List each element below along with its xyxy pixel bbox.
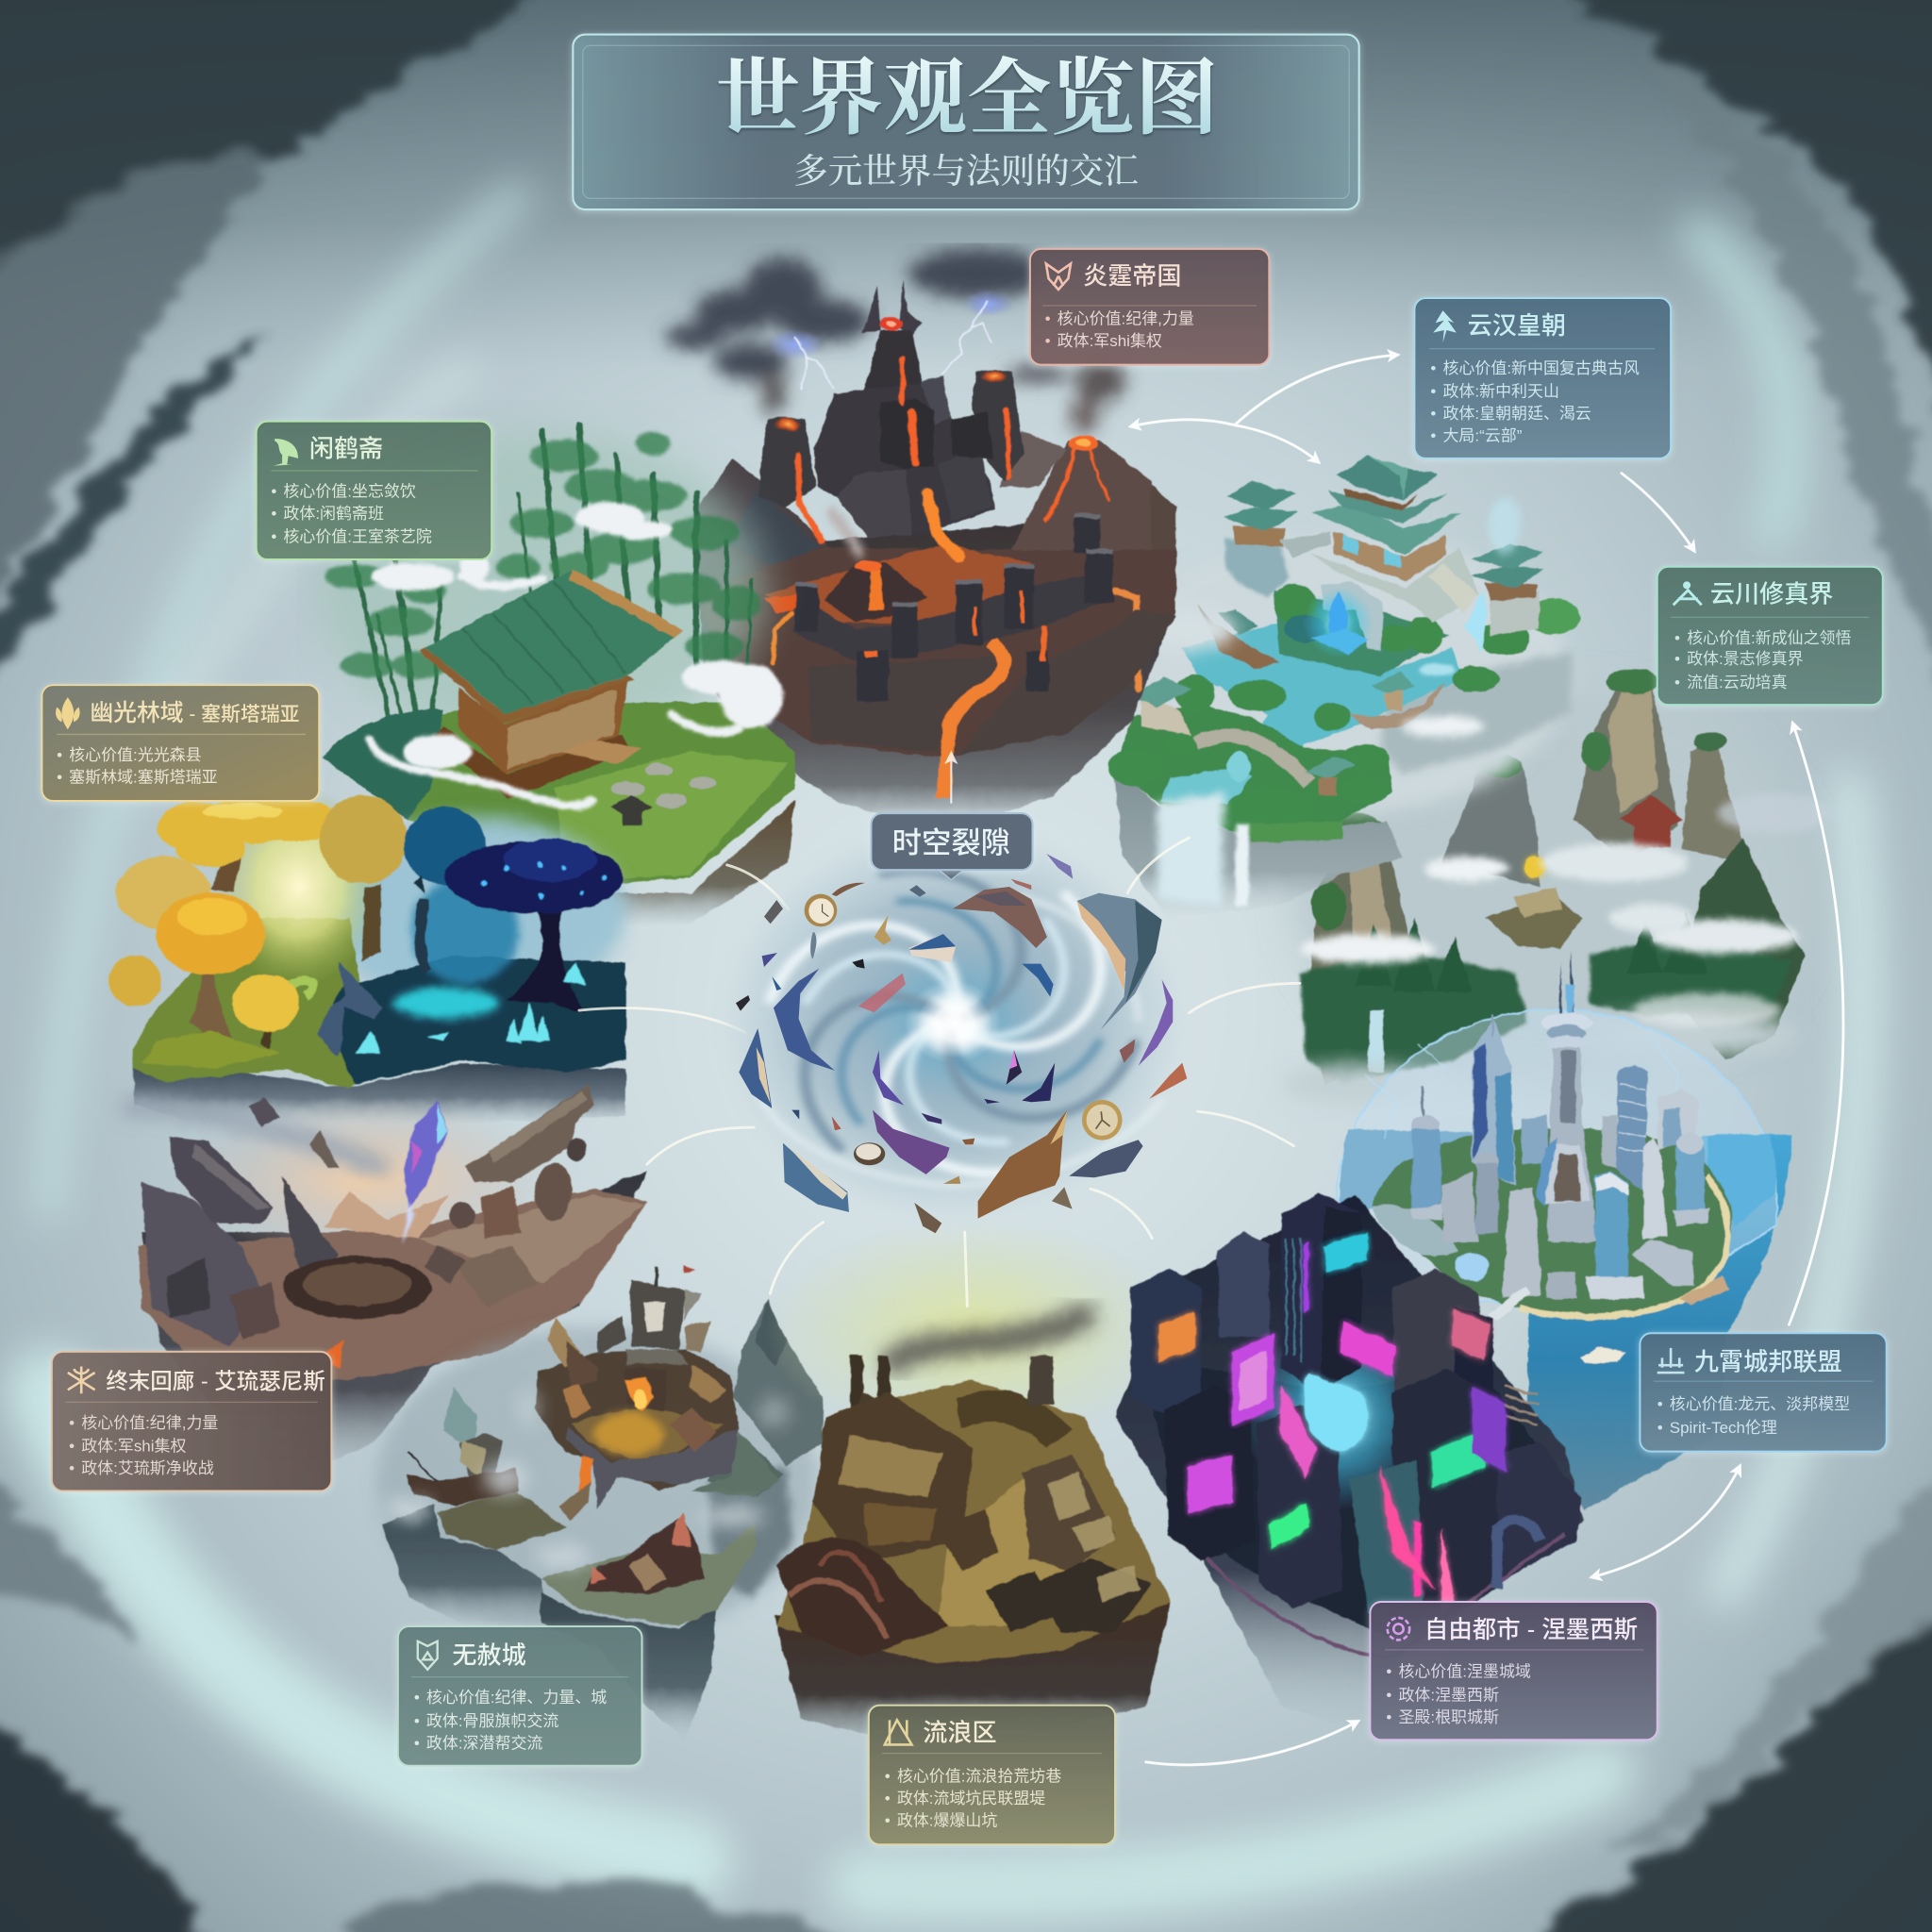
panel: 流浪区: • [885, 1812, 891, 1830]
subtitle: 多元世界与法则的交汇 [793, 151, 1139, 190]
island: cyber city [1115, 1192, 1583, 1731]
panel: 闲鹤斋: 核心价值:王室茶艺院 [283, 528, 432, 546]
panel: 云汉皇朝: • [1430, 427, 1436, 445]
panel: 幽光林域: • [57, 746, 62, 764]
arrow: to cloud palace [1235, 425, 1319, 462]
clock: upper left [805, 883, 865, 959]
palace [1333, 531, 1446, 582]
arrow: to volcano empire [1131, 420, 1235, 426]
side towers [759, 418, 816, 507]
panel: 炎霆帝国 [1030, 249, 1269, 365]
crater [283, 1257, 431, 1319]
panel: 云川修真界: 云川修真界 [1710, 580, 1833, 608]
central keep [861, 286, 880, 333]
panel: 云汉皇朝: • [1430, 405, 1436, 423]
glow rock [318, 962, 384, 1057]
panel: 九霄城邦联盟: 九霄城邦联盟 [1694, 1347, 1842, 1375]
debris shards [736, 854, 1187, 1233]
right pagoda [1491, 591, 1540, 635]
panel: 闲鹤斋 [257, 422, 491, 559]
crystal rift [404, 1101, 448, 1208]
left pagoda [1233, 525, 1286, 547]
island: glowlight forest [109, 786, 625, 1125]
panel: 无赦城: 政体:骨服旗帜交流 [426, 1712, 558, 1730]
wrecks [168, 1137, 274, 1224]
panel: 流浪区: • [885, 1768, 891, 1786]
spire [733, 1299, 824, 1465]
panel: 云川修真界: • [1674, 650, 1680, 668]
fort [535, 1349, 739, 1491]
panel: 云汉皇朝: 核心价值:新中国复古典古风 [1442, 359, 1640, 377]
panel: 九霄城邦联盟 [1640, 1333, 1887, 1452]
panel: 幽光林域: • [57, 768, 62, 786]
island: shattered wasteland [123, 1085, 648, 1485]
panel: 云汉皇朝: • [1430, 359, 1436, 377]
island: karst mountains [1281, 669, 1831, 1104]
panel: 云汉皇朝: 云汉皇朝 [1468, 311, 1566, 340]
rift label [871, 813, 1033, 880]
panel: 终末回廊: 政体:军shi集权 [81, 1438, 186, 1456]
title: 世界观全览图 [716, 54, 1219, 146]
clock: lower right [1082, 1100, 1123, 1141]
rift upward arrow [950, 754, 952, 804]
left isle [443, 1387, 476, 1453]
lower cliff [696, 512, 1176, 833]
panel: 闲鹤斋: 政体:闲鹤斋班 [283, 505, 384, 523]
lower wall [792, 575, 1107, 660]
panel: 云汉皇朝: • [1430, 383, 1436, 401]
ground [139, 1189, 648, 1390]
panel: 无赦城: • [414, 1734, 420, 1752]
icon: shield crest [418, 1641, 438, 1670]
panel: 自由都市 [1370, 1602, 1657, 1740]
panel: 云汉皇朝: 大局:“云部” [1442, 427, 1523, 445]
panel: 自由都市: • [1386, 1708, 1391, 1726]
panel: 闲鹤斋: 闲鹤斋 [309, 435, 383, 463]
palace platform [1311, 547, 1478, 623]
panel: 自由都市: • [1386, 1663, 1391, 1681]
lightning [795, 300, 992, 390]
arrow: alliance to cultivation realm [1789, 724, 1843, 1324]
arrow: wasteland to free city [1146, 1722, 1357, 1765]
island: pirate stronghold [377, 1266, 824, 1739]
icon: flame crest [1046, 264, 1071, 290]
panel: 闲鹤斋: • [271, 505, 276, 523]
boats [1198, 604, 1280, 668]
panel: 终末回廊: • [69, 1459, 75, 1477]
panel: 流浪区: 核心价值:流浪拾荒坊巷 [897, 1768, 1061, 1786]
arrow: free city to alliance [1592, 1466, 1740, 1577]
panel: 炎霆帝国: • [1045, 332, 1051, 350]
panel: 闲鹤斋: • [271, 482, 276, 500]
panel: 流浪区: • [885, 1790, 891, 1807]
panel: 流浪区: 政体:爆爆山坑 [897, 1812, 997, 1830]
icon: crane [274, 439, 298, 466]
panel: 无赦城 [398, 1626, 641, 1766]
island: scrap wasteland [764, 1220, 1183, 1756]
panel: 闲鹤斋: 核心价值:坐忘敛饮 [283, 482, 416, 500]
lava streams [773, 358, 1139, 689]
panel: 云川修真界: • [1674, 674, 1680, 691]
time-space vortex [710, 814, 1195, 1233]
central spire [1569, 951, 1574, 1012]
icon: cyber flower [1388, 1618, 1409, 1640]
fog [387, 1390, 790, 1568]
clouds [371, 503, 784, 769]
sea [1528, 1135, 1792, 1509]
storm clouds [665, 248, 1125, 434]
rock mountains and ground [696, 459, 827, 607]
connector lines to the rift [579, 838, 1300, 1306]
panel: 幽光林域 [42, 685, 319, 801]
left inner volcano [824, 563, 927, 623]
panel: 九霄城邦联盟: 核心价值:龙元、淡邦模型 [1670, 1395, 1850, 1413]
left tower base [1224, 538, 1290, 597]
panel: 炎霆帝国: • [1045, 310, 1051, 328]
arrows between worlds [1131, 355, 1843, 1765]
icon: cloud pine [1433, 310, 1457, 342]
icon: withered lotus [68, 1366, 95, 1393]
panel: 云汉皇朝 [1414, 298, 1671, 458]
panel: 云汉皇朝: 政体:皇朝朝廷、渴云 [1442, 405, 1591, 423]
island: cloud palace [1108, 456, 1580, 918]
land [1371, 1128, 1732, 1317]
panel: 云川修真界 [1657, 567, 1883, 705]
panel: 无赦城: 无赦城 [452, 1641, 526, 1669]
panel: 终末回廊 [52, 1352, 331, 1491]
arrow: court to cultivation realm [1622, 474, 1694, 551]
panel: 自由都市: 圣殿:根职城斯 [1398, 1708, 1499, 1726]
panel: 自由都市: 自由都市 - 涅墨西斯 [1424, 1617, 1638, 1643]
panel: 终末回廊: 政体:艾琉斯净收战 [81, 1459, 214, 1477]
panel: 幽光林域: 核心价值:光光森县 [69, 746, 202, 764]
panel: 终末回廊: • [69, 1414, 75, 1432]
cliffs [382, 1503, 547, 1629]
spiral arms [755, 836, 1163, 1208]
panel: 幽光林域: 幽光林域 - 塞斯塔瑞亚 [90, 700, 300, 726]
panel: 终末回廊: 核心价值:纪律,力量 [81, 1414, 218, 1432]
panel: 无赦城: 核心价值:纪律、力量、城 [426, 1689, 607, 1707]
icon: cultivator [1674, 583, 1702, 605]
panel: 流浪区: 政体:流域坑民联盟堤 [897, 1790, 1045, 1807]
blue trees [404, 807, 486, 885]
panel: 云川修真界: 核心价值:新成仙之领悟 [1687, 629, 1852, 647]
panel: 炎霆帝国: 政体:军shi集权 [1058, 332, 1162, 350]
panel: 自由都市: 政体:涅墨西斯 [1398, 1686, 1499, 1704]
panel: 流浪区: 流浪区 [923, 1719, 997, 1747]
island: dome city [1337, 951, 1792, 1509]
golden trees [210, 840, 243, 893]
panel: 九霄城邦联盟: • [1657, 1395, 1663, 1413]
panel: 九霄城邦联盟: • [1657, 1419, 1663, 1437]
panel: 无赦城: • [414, 1712, 420, 1730]
panel: 云川修真界: • [1674, 629, 1680, 647]
crystals [356, 962, 585, 1054]
panel: 流浪区 [869, 1706, 1115, 1844]
lower isle [541, 1522, 758, 1625]
water and greens [1182, 623, 1462, 764]
dome shell [1337, 1009, 1776, 1302]
panel: 云川修真界: 流值:云动培真 [1687, 674, 1788, 691]
title panel [573, 35, 1359, 209]
clock: broken [854, 1142, 885, 1165]
ground lower [808, 658, 1002, 752]
icon: scrap tower [885, 1720, 912, 1744]
panel: 炎霆帝国: 炎霆帝国 [1083, 262, 1182, 291]
foreground towers [1676, 1141, 1705, 1214]
panel: 自由都市: • [1386, 1686, 1391, 1704]
arrow: empire to imperial court [1235, 355, 1397, 425]
rift label: 时空裂隙 [892, 826, 1010, 859]
panel: 无赦城: 政体:深潜帮交流 [426, 1734, 542, 1752]
panel: 云汉皇朝: 政体:新中利天山 [1442, 383, 1559, 401]
island: volcano fortress [665, 248, 1176, 833]
panel: 闲鹤斋: • [271, 528, 276, 546]
panel: 幽光林域: 塞斯林域:塞斯塔瑞亚 [69, 768, 218, 786]
waterfalls [1158, 792, 1224, 906]
panel: 无赦城: • [414, 1689, 420, 1707]
panel: 终末回廊: • [69, 1438, 75, 1456]
panel: 九霄城邦联盟: Spirit-Tech伦理 [1670, 1419, 1777, 1437]
panel: 终末回廊: 终末回廊 - 艾琉瑟尼斯 [106, 1369, 325, 1393]
pavilions and bridge [1141, 695, 1191, 736]
mist base [1116, 531, 1569, 814]
icon: city skyline [1657, 1348, 1684, 1373]
towers [1522, 1115, 1549, 1163]
island: bamboo retreat [321, 425, 794, 926]
bamboo grove [355, 425, 752, 754]
panel: 云川修真界: 政体:景志修真界 [1687, 650, 1804, 668]
panel: 炎霆帝国: 核心价值:纪律,力量 [1058, 310, 1194, 328]
panel: 自由都市: 核心价值:涅墨城域 [1398, 1663, 1531, 1681]
icon: golden leaf [56, 697, 80, 729]
